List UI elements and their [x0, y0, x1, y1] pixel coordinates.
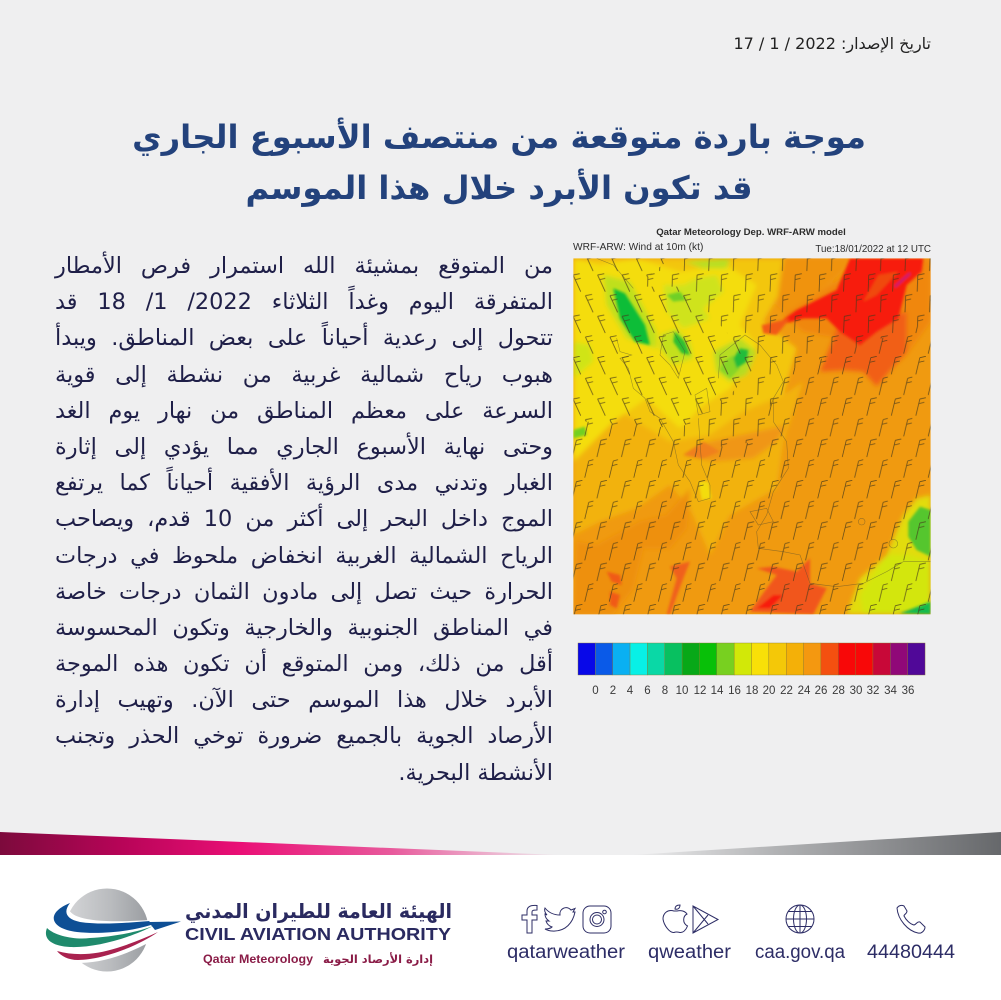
body text: الرياح الشمالية الغربية انخفاض ملحوظ في درجات	[55, 542, 553, 568]
body text: أقل من ذلك، ومن المتوقع أن تكون هذه الموجة	[55, 651, 553, 677]
logo emblem	[46, 888, 181, 972]
body text: المتفرقة اليوم وغداً الثلاثاء 18 /1 /2022 قد	[55, 289, 553, 315]
color scale legend: 28	[832, 685, 845, 697]
color scale legend: 0	[592, 685, 599, 697]
icon: play store	[693, 906, 718, 933]
icon: phone	[897, 905, 925, 933]
color scale legend: 34	[884, 685, 897, 697]
organisation name english: CIVIL AVIATION AUTHORITY	[185, 924, 451, 944]
body text	[54, 251, 553, 786]
map titles: Qatar Meteorology Dep. WRF-ARW model	[656, 227, 846, 238]
icon: globe	[786, 905, 814, 933]
color scale legend: 8	[662, 685, 668, 697]
color scale legend: 18	[746, 685, 758, 697]
color scale legend: 36	[902, 685, 914, 697]
color scale legend: 22	[780, 685, 793, 697]
department name arabic: إدارة الأرصاد الجوية	[323, 952, 433, 967]
body text: الحرارة حيث تصل إلى مادون الثمان درجات خاصة	[55, 579, 553, 605]
contact labels: qatarweather	[507, 942, 626, 963]
body text: من المتوقع بمشيئة الله استمرار فرص الأمطار	[55, 253, 553, 279]
contact labels: caa.gov.qa	[755, 942, 845, 963]
color scale legend: 2	[610, 685, 616, 697]
department name english: Qatar Meteorology	[203, 952, 313, 966]
color scale legend: 26	[815, 685, 827, 697]
color scale legend: 32	[867, 685, 879, 697]
title: موجة باردة متوقعة من منتصف الأسبوع الجاري	[132, 118, 866, 156]
color scale legend: 20	[763, 685, 775, 697]
issue date: تاريخ الإصدار: 17 / 1 / 2022	[733, 34, 931, 53]
color scale legend: 12	[694, 685, 706, 697]
color scale legend: 4	[627, 685, 634, 697]
body text: الأرصاد الجوية بالجميع ضرورة توخي الحذر وتجنب	[55, 723, 553, 749]
icon: apple	[663, 905, 688, 933]
map titles	[573, 227, 931, 255]
contact labels	[507, 942, 955, 963]
color scale legend: 6	[644, 685, 651, 697]
contact labels: 44480444	[867, 942, 955, 963]
title: قد تكون الأبرد خلال هذا الموسم	[245, 169, 753, 207]
ribbon: magenta	[0, 832, 560, 855]
body text: تتحول إلى رعدية أحياناً على بعض المناطق. ويبدأ	[55, 325, 553, 351]
icon: facebook	[522, 905, 537, 933]
color scale legend: 16	[728, 685, 741, 697]
ribbon: gray	[630, 832, 1001, 855]
color scale legend	[578, 643, 925, 697]
weather map figure	[0, 228, 1001, 1000]
wind speed map	[573, 258, 931, 614]
organisation name arabic: الهيئة العامة للطيران المدني	[185, 899, 452, 924]
body text: السرعة على معظم المناطق من نهار يوم الغد	[55, 398, 553, 424]
body text: هبوب رياح شمالية غربية من نشطة إلى قوية	[55, 362, 553, 388]
title	[132, 118, 866, 207]
body text: الغبار وتدني مدى الرؤية الأفقية أحياناً كما يرتفع	[55, 470, 553, 496]
color scale legend: 14	[711, 685, 724, 697]
color scale legend: 24	[798, 685, 811, 697]
contact labels: qweather	[648, 942, 732, 963]
icon: instagram	[583, 906, 611, 933]
body text: في المناطق الجنوبية والخارجية وتكون المحسوسة	[55, 615, 553, 641]
body text: وحتى نهاية الأسبوع الجاري مما يؤدي إلى إثارة	[55, 434, 553, 460]
color scale legend: 10	[676, 685, 688, 697]
body text: الموج داخل البحر إلى أكثر من 10 قدم، ويصاحب	[55, 506, 553, 532]
icon: twitter	[545, 908, 575, 931]
body text: الأبرد خلال هذا الموسم حتى الآن. وتهيب إدارة	[55, 687, 553, 713]
map titles: WRF-ARW: Wind at 10m (kt)	[573, 242, 703, 253]
color scale legend: 30	[850, 685, 862, 697]
footer white band	[0, 855, 1001, 1000]
map titles: Tue:18/01/2022 at 12 UTC	[815, 244, 931, 255]
body text: الأنشطة البحرية.	[398, 760, 553, 786]
